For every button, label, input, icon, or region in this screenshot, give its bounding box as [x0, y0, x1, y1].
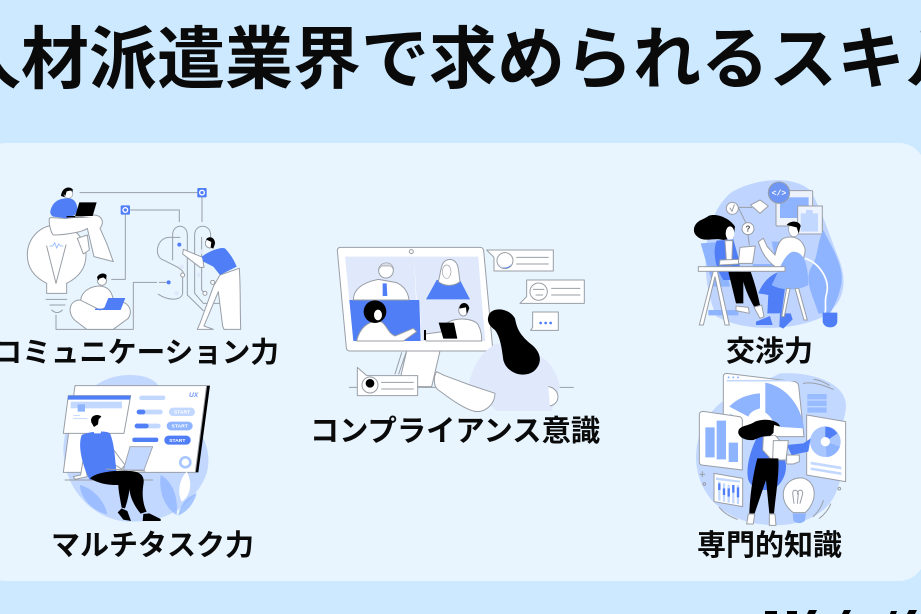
table: [699, 271, 729, 325]
chairs: [701, 242, 730, 287]
woman: [694, 215, 735, 240]
chat bubbles: [487, 250, 553, 271]
laptop: [753, 242, 782, 266]
illustration: multitask: START: [174, 410, 190, 416]
woman: [787, 455, 799, 464]
person: woman in hijab: [426, 280, 470, 299]
illustration: negotiation: ?: [746, 225, 751, 234]
woman from behind: [468, 343, 560, 411]
circuit brain: [157, 226, 227, 311]
illustration: multitask: UX: [189, 392, 199, 399]
window: [63, 396, 131, 433]
panel: main content: [0, 143, 921, 581]
small chart card: [714, 473, 743, 507]
person: [73, 445, 125, 479]
label: compliance: コンプライアンス意識: [310, 415, 600, 448]
illustration: multitask: START: [172, 424, 188, 430]
person: curly hair: [357, 321, 417, 341]
illustration: communication: [27, 188, 241, 329]
person: man with tie: [353, 279, 409, 300]
illustration: multitask: [63, 375, 210, 522]
standing man: [197, 268, 241, 329]
illustration: compliance: [337, 247, 584, 412]
label: expertise: 専門的知識: [697, 529, 842, 562]
illustration: negotiation: [694, 180, 844, 329]
illustration: multitask: START: [169, 438, 185, 444]
illustration: negotiation: </>: [772, 190, 786, 199]
person: man with tablet: [425, 319, 482, 341]
plant: [808, 230, 842, 313]
illustration: expertise: [696, 373, 846, 525]
label: communication: コミュニケーション力: [0, 337, 279, 369]
seated man: [81, 286, 113, 310]
label: negotiation: 交渉力: [726, 335, 813, 368]
man: [758, 272, 795, 313]
gear nodes: [197, 188, 207, 197]
left chart card: [699, 411, 742, 470]
lightbulb: [783, 478, 814, 513]
label: multitask: マルチタスク力: [51, 529, 254, 562]
logo cropped at bottom edge: [765, 610, 917, 614]
leaves: [80, 485, 107, 514]
right donut card: [807, 415, 846, 482]
